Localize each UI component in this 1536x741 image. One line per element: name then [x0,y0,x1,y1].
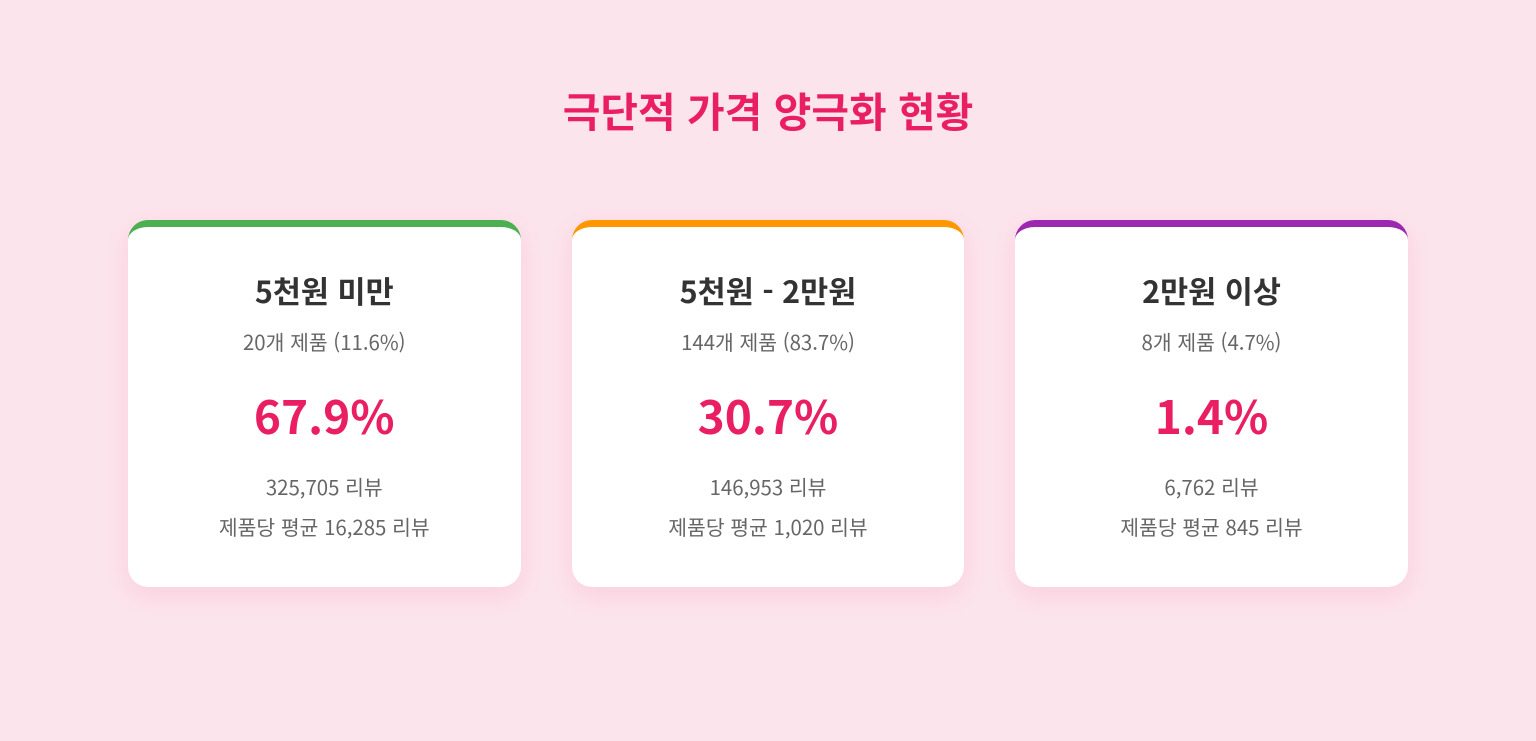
product count: 8개 제품 (4.7%) [1142,326,1281,356]
panel: over 20,000 won [1015,220,1408,587]
review share: 1.4% [1155,382,1268,448]
review total: 146,953 리뷰 [710,471,826,501]
title: 극단적 가격 양극화 현황 [563,80,973,139]
panel: under 5,000 won [128,220,520,587]
average reviews per product: 제품당 평균 845 리뷰 [1120,511,1303,541]
review share: 67.9% [254,382,395,448]
average reviews per product: 제품당 평균 16,285 리뷰 [219,511,430,541]
panel: 5,000 to 20,000 won [572,220,964,587]
card heading: 2만원 이상 [1142,268,1281,312]
card heading: 5천원 미만 [255,268,394,312]
product count: 144개 제품 (83.7%) [681,326,855,356]
card heading: 5천원 - 2만원 [680,268,856,312]
product count: 20개 제품 (11.6%) [243,326,406,356]
review total: 325,705 리뷰 [266,471,383,501]
review share: 30.7% [698,382,838,448]
average reviews per product: 제품당 평균 1,020 리뷰 [668,511,868,541]
review total: 6,762 리뷰 [1164,471,1259,501]
